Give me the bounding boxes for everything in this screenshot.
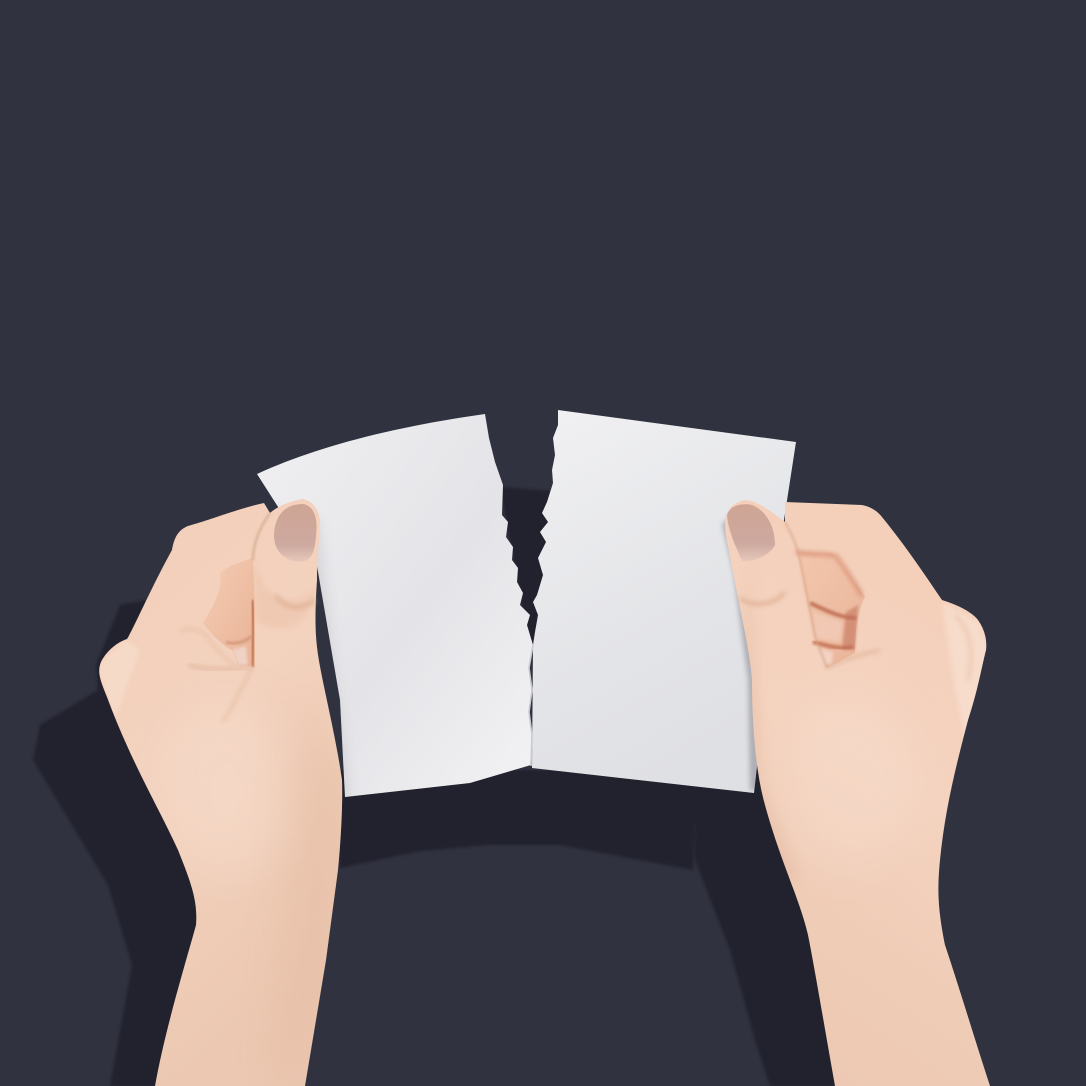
cast shadows [33, 487, 845, 1086]
palm creases [188, 665, 252, 669]
thumbnail [274, 504, 317, 562]
shading [150, 732, 276, 872]
left hand: palm and wrist [97, 499, 345, 1086]
inner fingers [203, 558, 255, 667]
finger creases [796, 552, 862, 596]
illustration: hands tearing a sheet of paper [33, 410, 990, 1086]
palm fold [827, 650, 880, 668]
shadow: paper bottom [335, 770, 697, 870]
thumb knuckle crease [740, 592, 785, 604]
thumb edge [253, 513, 270, 560]
thumb knuckle crease [275, 595, 315, 607]
torn seam [529, 645, 533, 766]
shadow: inside the tear [500, 487, 555, 650]
paper: right half [532, 410, 796, 793]
thumb edge [785, 522, 827, 668]
shading [817, 796, 864, 837]
finger creases [252, 600, 253, 667]
paper: left half [257, 414, 533, 800]
shadow: left hand [33, 600, 210, 1086]
inner fingers [797, 552, 865, 668]
right hand: palm and wrist [725, 500, 990, 1086]
thumbnail [727, 504, 775, 561]
shadow: right hand [695, 770, 845, 1086]
